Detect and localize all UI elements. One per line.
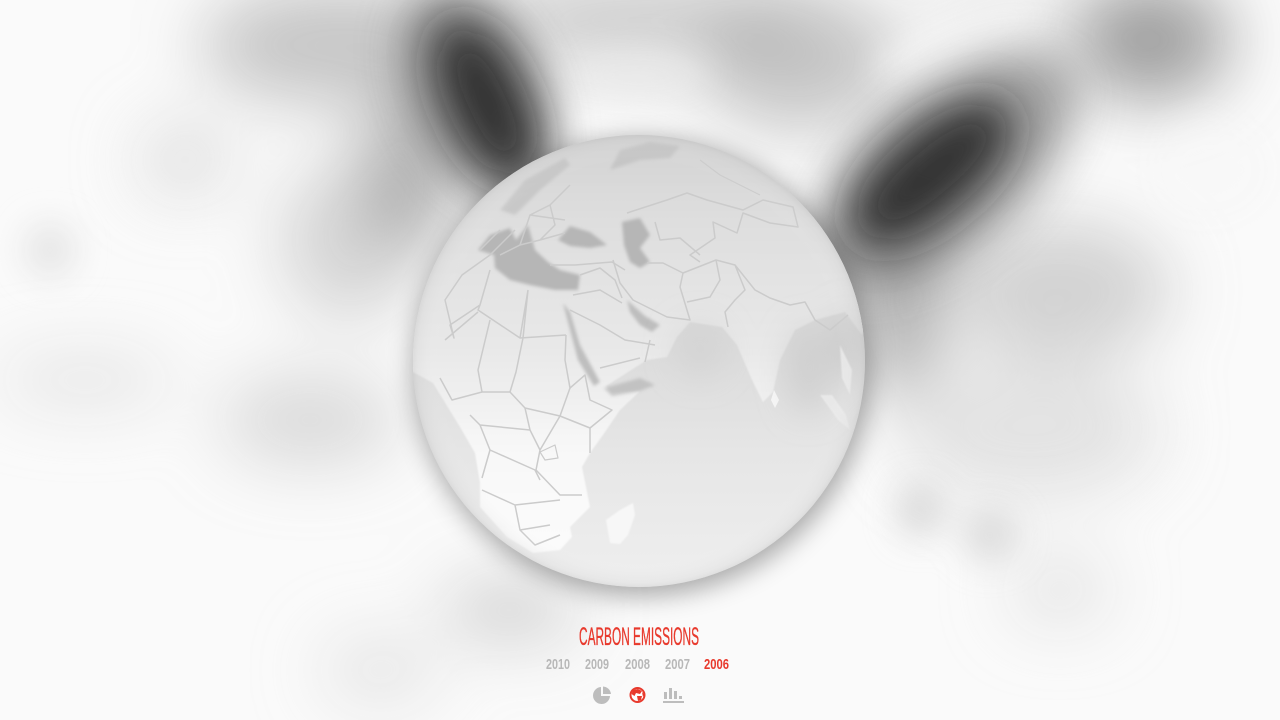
ocean — [414, 150, 865, 587]
icon: pie chart — [593, 686, 611, 704]
Red Sea — [563, 303, 600, 386]
Black Sea — [558, 226, 607, 248]
Persian Gulf — [627, 300, 660, 332]
Barents Sea — [612, 142, 678, 168]
Gulf of Aden — [604, 378, 655, 396]
Madagascar — [606, 503, 635, 544]
land masses: Eurasia, Arabia and Africa — [413, 148, 863, 552]
year 2010: 2010 — [546, 656, 570, 673]
year 2007: 2007 — [665, 656, 690, 673]
year 2006 selected: 2006 — [704, 656, 729, 673]
Caspian Sea — [622, 218, 650, 268]
text: CARBON EMISSIONS — [579, 623, 699, 651]
dark plume right — [772, 7, 1118, 333]
Arabian Sea and Bay of Bengal shading — [791, 323, 860, 402]
rim shading — [413, 135, 865, 587]
South-East Asia land — [821, 346, 852, 420]
dark plume left — [371, 0, 585, 227]
globe — [400, 130, 880, 590]
icon: globe selected — [630, 688, 644, 702]
inland seas — [478, 142, 680, 396]
Baltic and North seas — [500, 158, 570, 215]
icon: bar chart — [663, 688, 684, 703]
Sri Lanka — [771, 390, 779, 408]
country borders — [440, 160, 848, 545]
year 2008: 2008 — [625, 656, 650, 673]
year 2009: 2009 — [585, 656, 609, 673]
year selector — [546, 656, 729, 673]
globe drop shadow — [414, 139, 870, 595]
Mediterranean — [478, 225, 580, 290]
